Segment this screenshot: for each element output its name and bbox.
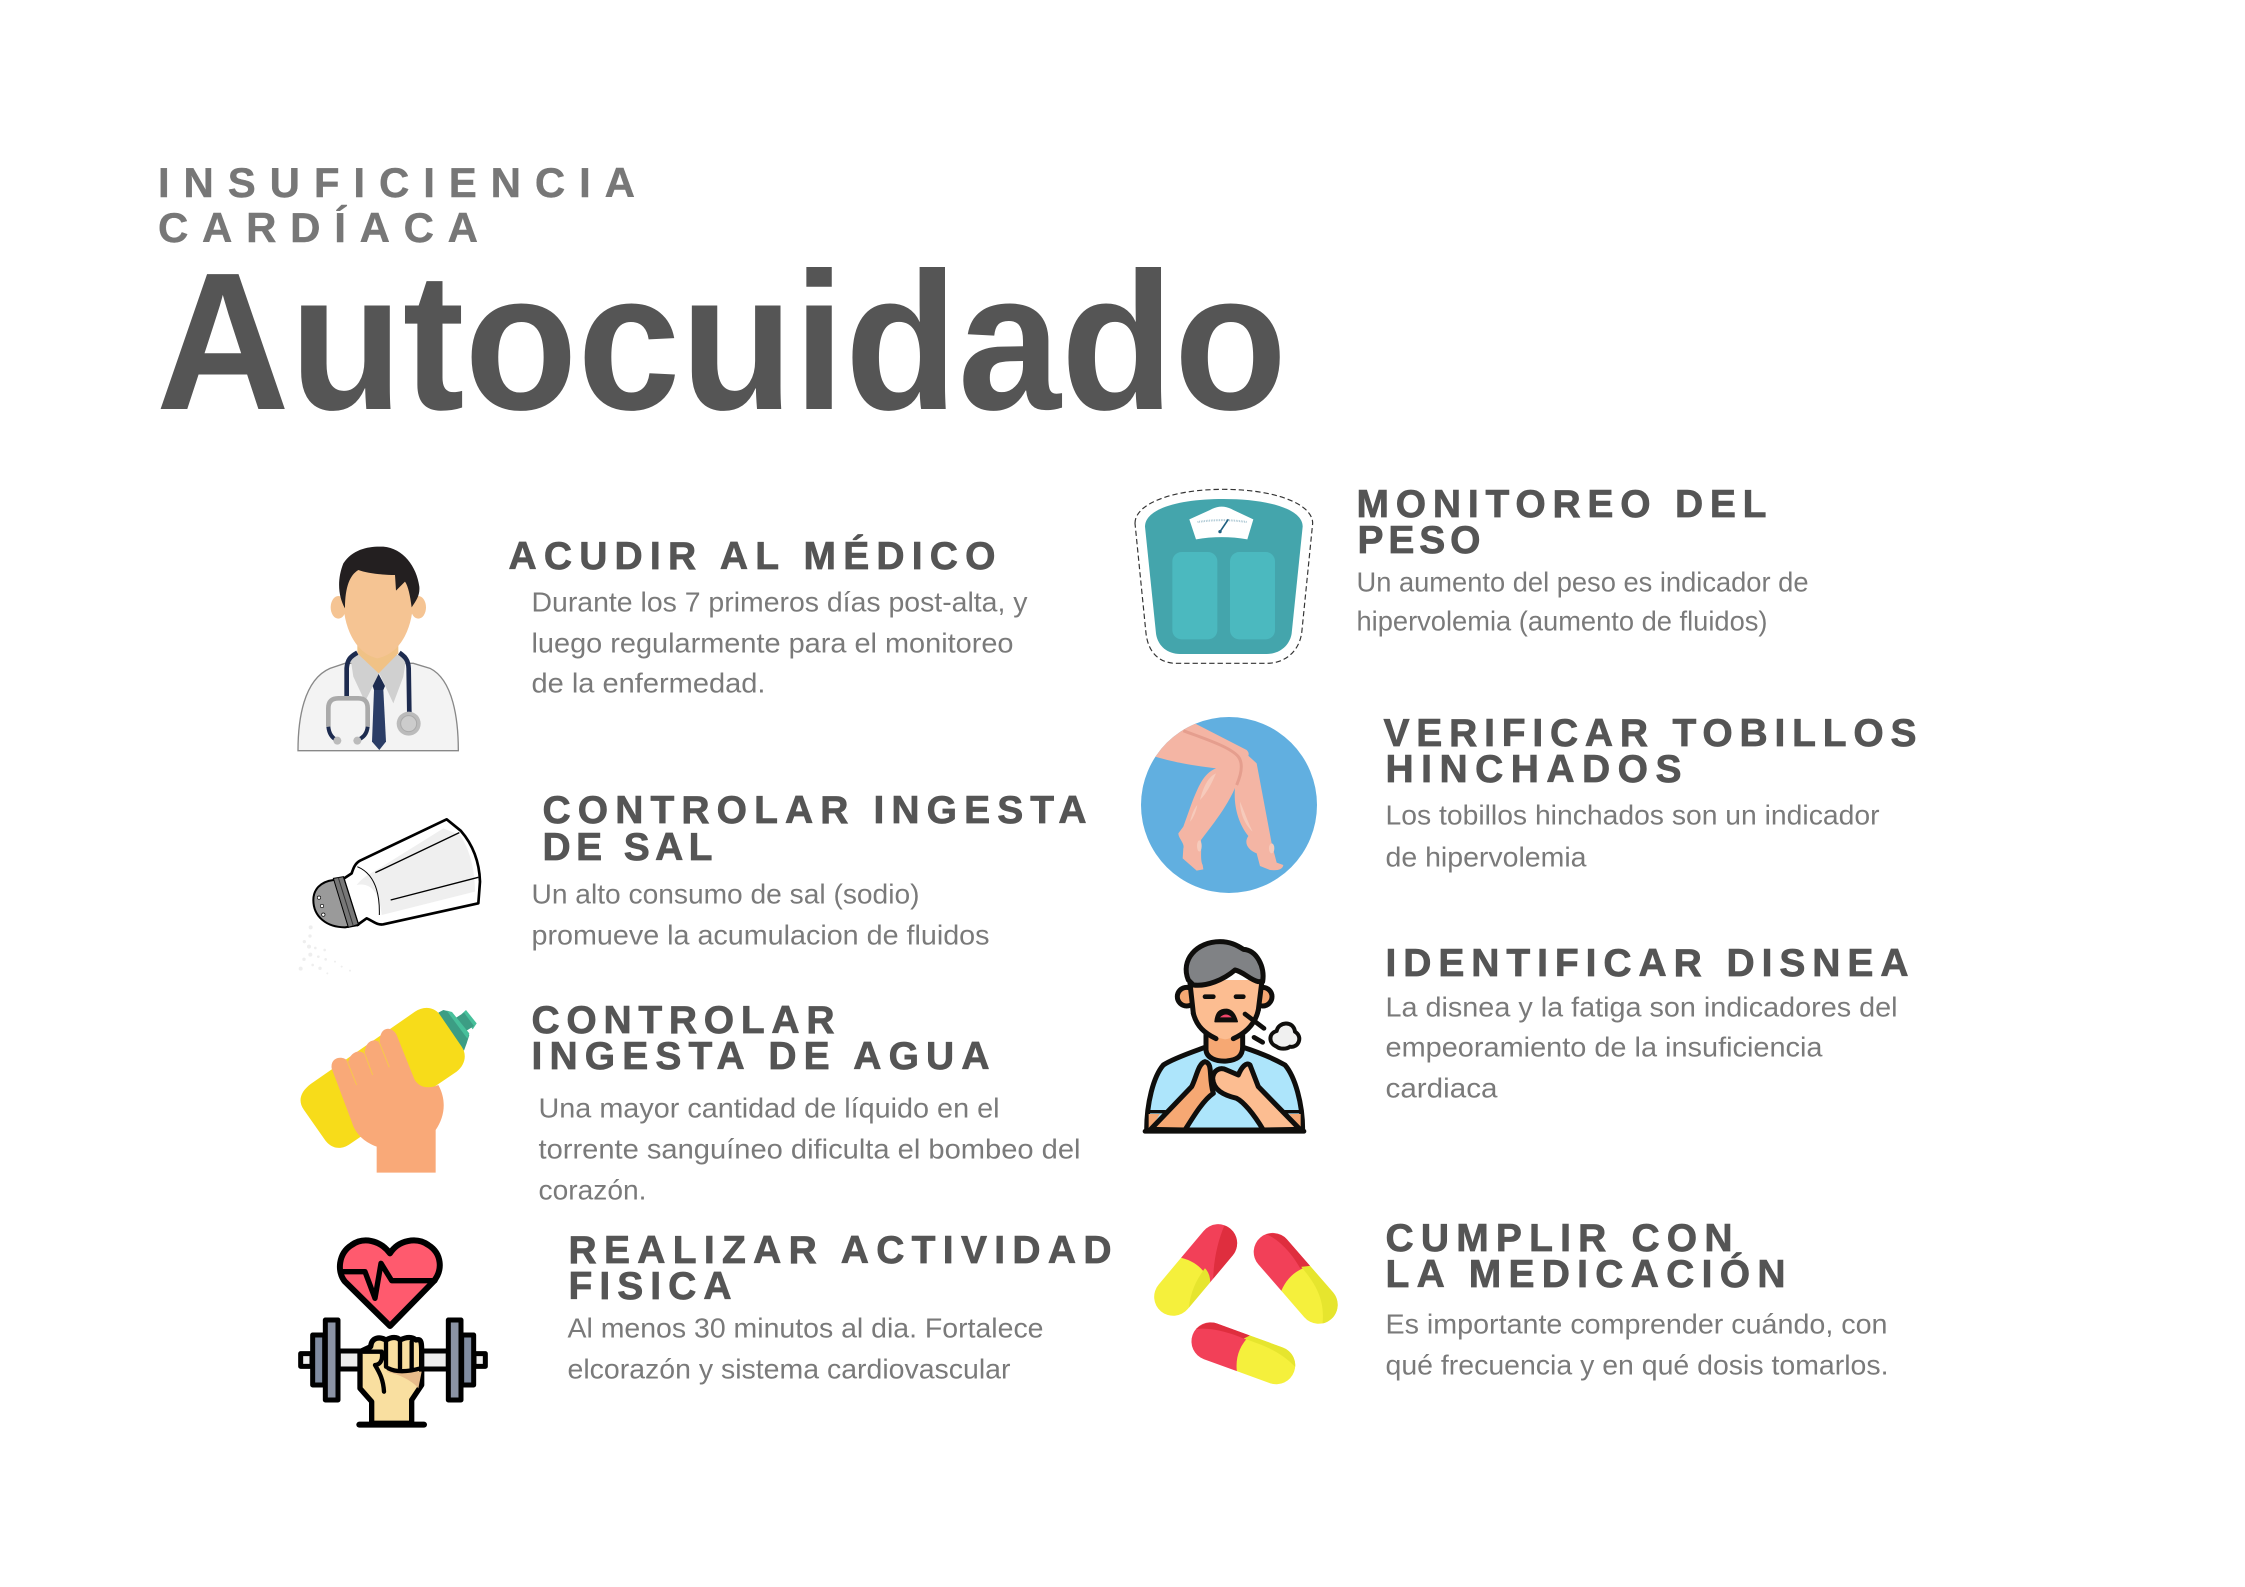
panel: cumplir con la medicación: [1146, 1216, 1888, 1390]
description: de hipervolemia: [1386, 842, 1587, 873]
description: [1356, 567, 1808, 637]
panel: acudir al médico: [298, 534, 1027, 751]
heading: ACUDIR AL MÉDICO: [508, 534, 996, 578]
description: qué frecuencia y en qué dosis tomarlos.: [1386, 1350, 1888, 1381]
description: hipervolemia (aumento de fluidos): [1356, 606, 1768, 637]
heading: MONITOREO DEL: [1356, 483, 1766, 526]
description: Un alto consumo de sal (sodio): [532, 879, 920, 910]
panel: controlar ingesta de sal: [299, 789, 1086, 974]
icon: pills: [1146, 1216, 1346, 1390]
heading: [1386, 1217, 1786, 1296]
header: [156, 159, 1287, 451]
subtitle: INSUFICIENCIA: [158, 159, 635, 206]
icon: salt shaker: [299, 819, 480, 974]
description: [1386, 800, 1880, 873]
heading: CUMPLIR CON: [1386, 1217, 1732, 1260]
description: Al menos 30 minutos al dia. Fortalece: [568, 1313, 1044, 1344]
title: Autocuidado: [156, 232, 1287, 451]
heading: DE SAL: [542, 826, 712, 869]
heading: [1384, 712, 1916, 791]
description: luego regularmente para el monitoreo: [532, 628, 1014, 659]
description: Los tobillos hinchados son un indicador: [1386, 800, 1880, 831]
panel: controlar ingesta de agua: [301, 999, 1081, 1206]
heading: [1356, 483, 1766, 562]
description: [532, 587, 1028, 699]
description: promueve la acumulacion de fluidos: [532, 920, 990, 951]
description: [532, 879, 990, 951]
icon: swollen legs: [1141, 717, 1317, 893]
heading: [542, 789, 1086, 869]
heading: [532, 999, 990, 1078]
icon: heart and dumbbell: [301, 1240, 485, 1425]
description: [568, 1313, 1044, 1385]
heading: HINCHADOS: [1386, 748, 1682, 791]
heading: INGESTA DE AGUA: [532, 1035, 990, 1078]
heading: [568, 1229, 1112, 1308]
heading: PESO: [1358, 519, 1480, 562]
description: Es importante comprender cuándo, con: [1386, 1309, 1888, 1340]
description: La disnea y la fatiga son indicadores del: [1386, 992, 1898, 1023]
description: Una mayor cantidad de líquido en el: [538, 1093, 1000, 1124]
panel: realizar actividad física: [301, 1229, 1111, 1425]
description: [538, 1093, 1080, 1206]
subtitle: [158, 159, 635, 251]
description: [1386, 1309, 1888, 1381]
description: [1386, 992, 1898, 1104]
description: elcorazón y sistema cardiovascular: [568, 1354, 1010, 1385]
description: Un aumento del peso es indicador de: [1356, 567, 1808, 598]
heading: REALIZAR ACTIVIDAD: [568, 1229, 1112, 1272]
description: corazón.: [538, 1175, 646, 1206]
heading: FISICA: [568, 1265, 732, 1308]
panel: identificar disnea: [1145, 942, 1908, 1131]
description: cardiaca: [1386, 1073, 1498, 1104]
description: torrente sanguíneo dificulta el bombeo del: [538, 1134, 1080, 1165]
subtitle: CARDÍACA: [158, 204, 478, 251]
icon: hand holding bottle: [301, 1008, 477, 1173]
heading: VERIFICAR TOBILLOS: [1384, 712, 1916, 755]
description: empeoramiento de la insuficiencia: [1386, 1032, 1823, 1063]
heading: CONTROLAR: [532, 999, 834, 1042]
description: Durante los 7 primeros días post-alta, y: [532, 587, 1028, 618]
description: de la enfermedad.: [532, 668, 766, 699]
icon: person short of breath: [1145, 942, 1304, 1131]
heading: IDENTIFICAR DISNEA: [1386, 942, 1908, 985]
icon: doctor: [298, 547, 458, 751]
heading: LA MEDICACIÓN: [1386, 1252, 1786, 1296]
heading: CONTROLAR INGESTA: [542, 789, 1086, 832]
panel: monitoreo del peso: [1135, 483, 1808, 663]
icon: bathroom scale: [1135, 489, 1313, 663]
panel: verificar tobillos hinchados: [1141, 712, 1916, 893]
